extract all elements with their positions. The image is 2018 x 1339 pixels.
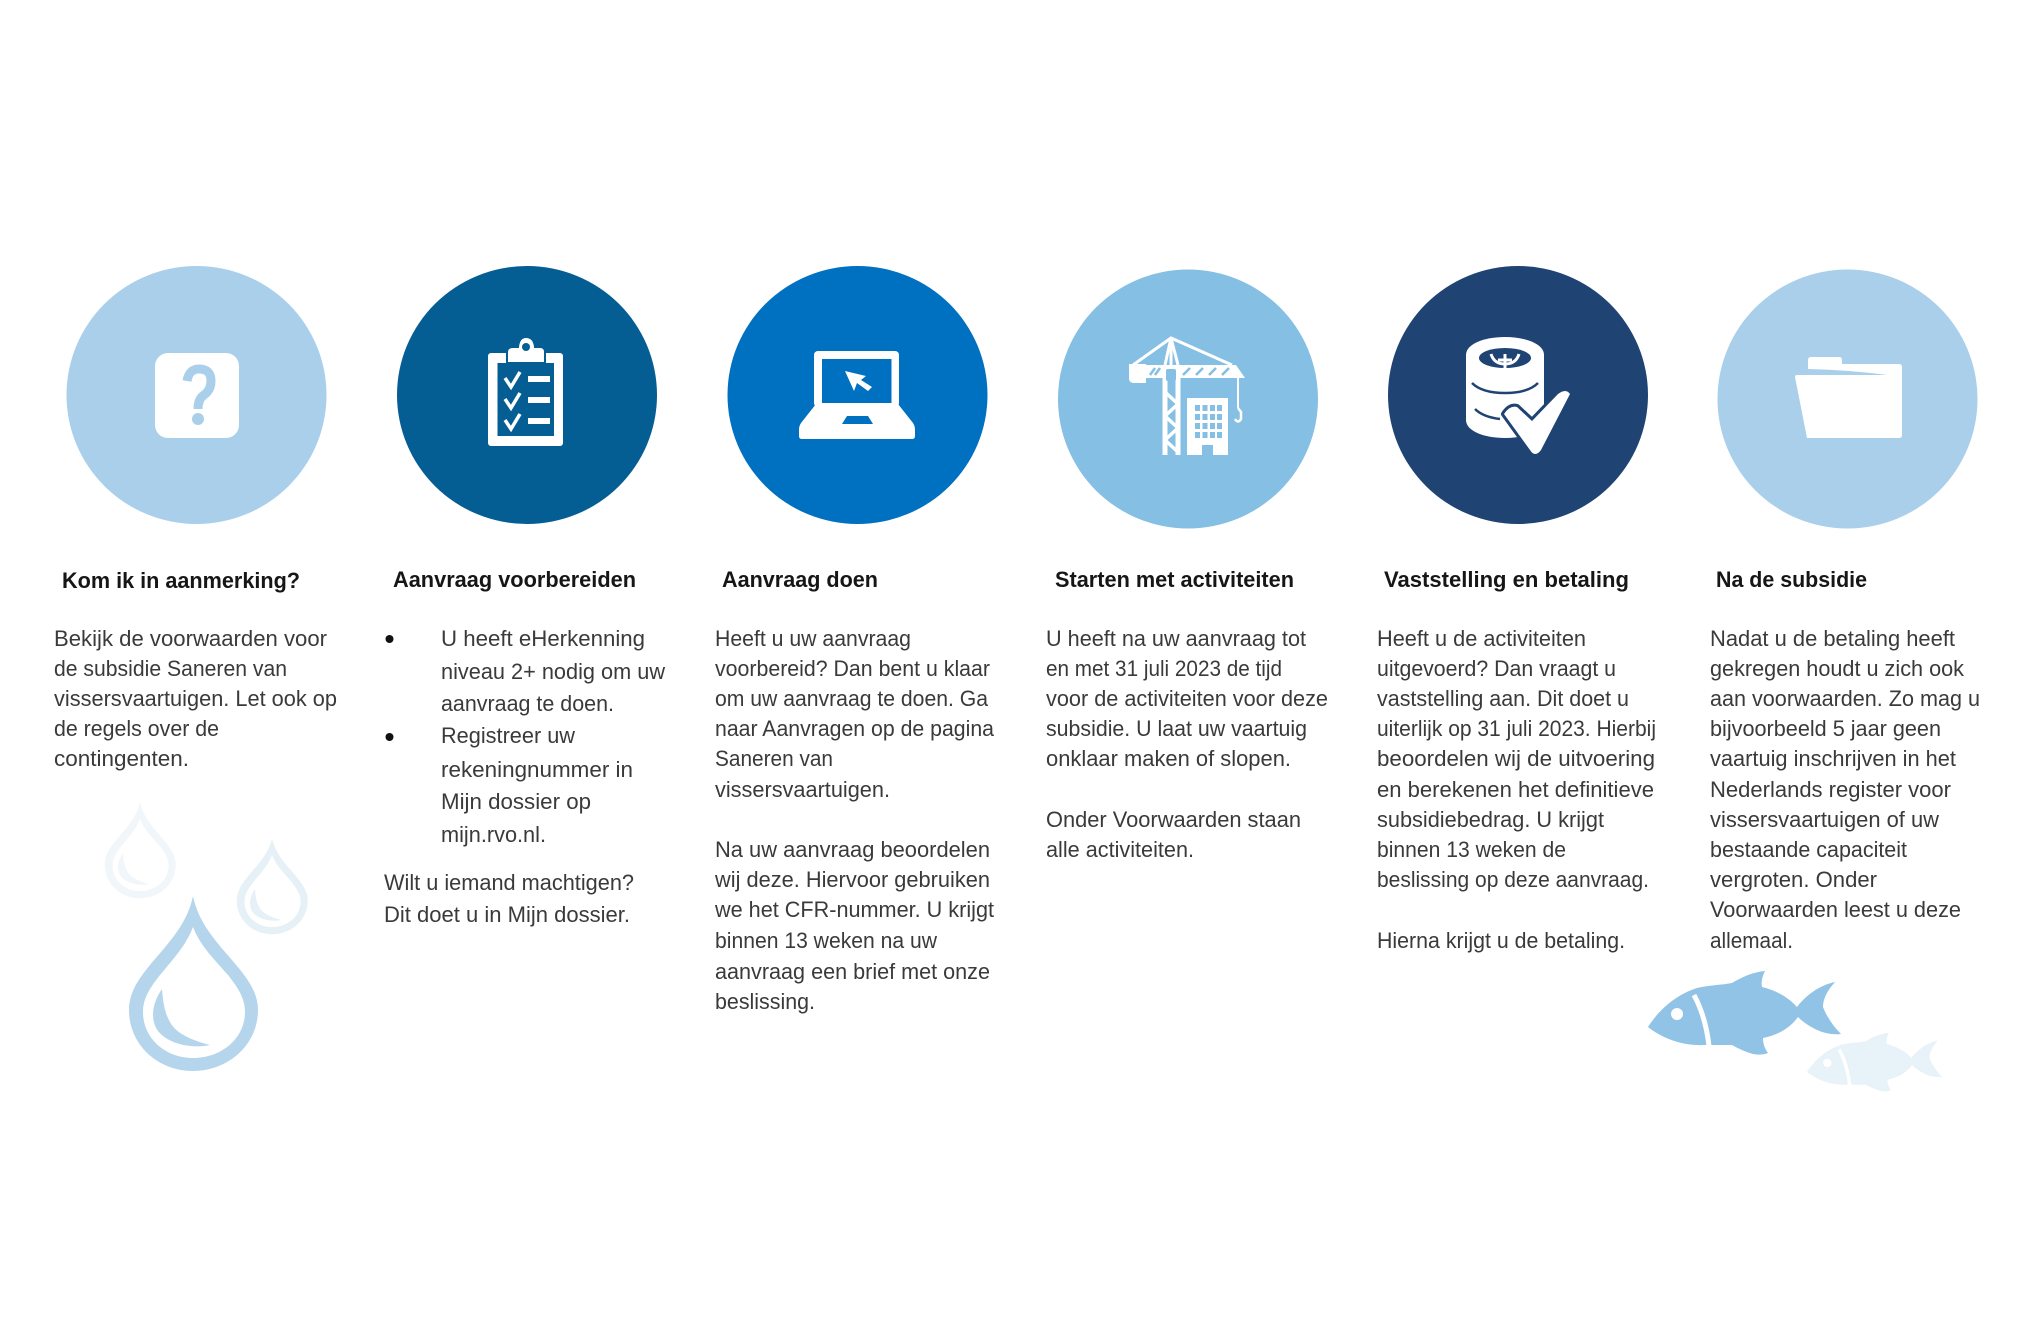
text block: binnen 13 weken de [1377, 837, 1566, 862]
text block: binnen 13 weken na uw [715, 928, 937, 953]
text block: wij deze. Hiervoor gebruiken [714, 867, 990, 892]
text block: alle activiteiten. [1046, 837, 1194, 862]
icon: crane and building circle [1058, 270, 1318, 528]
bulleted list: niveau 2+ nodig om uw [441, 659, 665, 684]
icon: small faint fish [1807, 1033, 1942, 1091]
text block: uiterlijk op 31 juli 2023. Hierbij [1377, 716, 1656, 741]
bulleted list: aanvraag te doen. [441, 691, 614, 716]
text block: voorbereid? Dan bent u klaar [715, 656, 990, 681]
heading: Na de subsidie [1716, 567, 1867, 592]
heading: Kom ik in aanmerking? [62, 568, 300, 593]
text block: vissersvaartuigen. Let ook op [54, 686, 337, 711]
icon: clipboard checklist circle [397, 266, 657, 524]
panel: Aanvraag doen [714, 266, 995, 1014]
text block: naar Aanvragen op de pagina [715, 716, 995, 741]
text block: onklaar maken of slopen. [1046, 746, 1291, 771]
heading: Starten met activiteiten [1055, 567, 1294, 592]
text block [54, 626, 337, 771]
text block: Nadat u de betaling heeft [1710, 626, 1955, 651]
text block: de subsidie Saneren van [54, 656, 287, 681]
icon: water drops [105, 802, 308, 1071]
icon: fish [1648, 971, 1942, 1091]
text block: allemaal. [1710, 928, 1793, 953]
bulleted list [386, 626, 665, 847]
text block: vaartuig inschrijven in het [1710, 746, 1956, 771]
text block [1710, 626, 1980, 953]
icon: coins with checkmark circle [1388, 266, 1648, 524]
text block: de regels over de [54, 716, 219, 741]
text block: Bekijk de voorwaarden voor [54, 626, 327, 651]
bulleted list: U heeft eHerkenning [441, 626, 645, 651]
icon: laptop circle [728, 266, 988, 524]
text block [1046, 626, 1328, 862]
text block: Hierna krijgt u de betaling. [1377, 928, 1625, 953]
panel: Na de subsidie [1710, 270, 1980, 953]
text block: vissersvaartuigen. [715, 777, 890, 802]
text block: beslissing op deze aanvraag. [1377, 867, 1649, 892]
text block: Saneren van [715, 746, 833, 771]
panel: Vaststelling en betaling [1377, 266, 1656, 953]
heading: Aanvraag voorbereiden [393, 567, 636, 592]
text block: en met 31 juli 2023 de tijd [1046, 656, 1282, 681]
icon: question mark circle [66, 266, 326, 524]
text block: voor de activiteiten voor deze [1046, 686, 1328, 711]
text block: uitgevoerd? Dan vraagt u [1377, 656, 1616, 681]
text block: Wilt u iemand machtigen? [384, 870, 634, 895]
text block: U heeft na uw aanvraag tot [1046, 626, 1306, 651]
heading: Vaststelling en betaling [1384, 567, 1629, 592]
text block [384, 870, 634, 927]
text block: bestaande capaciteit [1710, 837, 1907, 862]
panel: Starten met activiteiten [1046, 270, 1328, 862]
text block: aanvraag een brief met onze [715, 959, 990, 984]
bulleted list: rekeningnummer in [441, 757, 633, 782]
heading: Aanvraag doen [722, 567, 878, 592]
text block: aan voorwaarden. Zo mag u [1710, 686, 1980, 711]
text block: Voorwaarden leest u deze [1710, 897, 1961, 922]
text block: vergroten. Onder [1710, 867, 1877, 892]
text block: bijvoorbeeld 5 jaar geen [1710, 716, 1941, 741]
bulleted list: Registreer uw [441, 723, 575, 748]
text block: contingenten. [54, 746, 189, 771]
text block: om uw aanvraag te doen. Ga [715, 686, 989, 711]
bulleted list: mijn.rvo.nl. [441, 822, 546, 847]
text block: beslissing. [715, 989, 815, 1014]
text block: en berekenen het definitieve [1377, 777, 1654, 802]
text block: beoordelen wij de uitvoering [1377, 746, 1655, 771]
text block: subsidiebedrag. U krijgt [1377, 807, 1604, 832]
text block: Na uw aanvraag beoordelen [715, 837, 990, 862]
text block: gekregen houdt u zich ook [1710, 656, 1965, 681]
text block: Heeft u uw aanvraag [715, 626, 911, 651]
icon: large drop [129, 896, 258, 1071]
text block: subsidie. U laat uw vaartuig [1046, 716, 1307, 741]
text block: Heeft u de activiteiten [1377, 626, 1586, 651]
text block: we het CFR-nummer. U krijgt [714, 897, 994, 922]
panel: Kom ik in aanmerking [54, 266, 337, 771]
text block: Dit doet u in Mijn dossier. [384, 902, 630, 927]
text block: vaststelling aan. Dit doet u [1377, 686, 1629, 711]
text block: vissersvaartuigen of uw [1710, 807, 1939, 832]
icon: faint left drop [105, 802, 176, 898]
text block [1377, 626, 1656, 953]
bulleted list: Mijn dossier op [441, 789, 591, 814]
icon: faint right drop [237, 838, 308, 934]
panel: Aanvraag voorbereiden [384, 266, 665, 927]
icon: folder circle [1718, 270, 1978, 528]
text block [714, 626, 995, 1014]
text block: Nederlands register voor [1710, 777, 1951, 802]
icon: large fish [1648, 971, 1841, 1055]
text block: Onder Voorwaarden staan [1046, 807, 1301, 832]
